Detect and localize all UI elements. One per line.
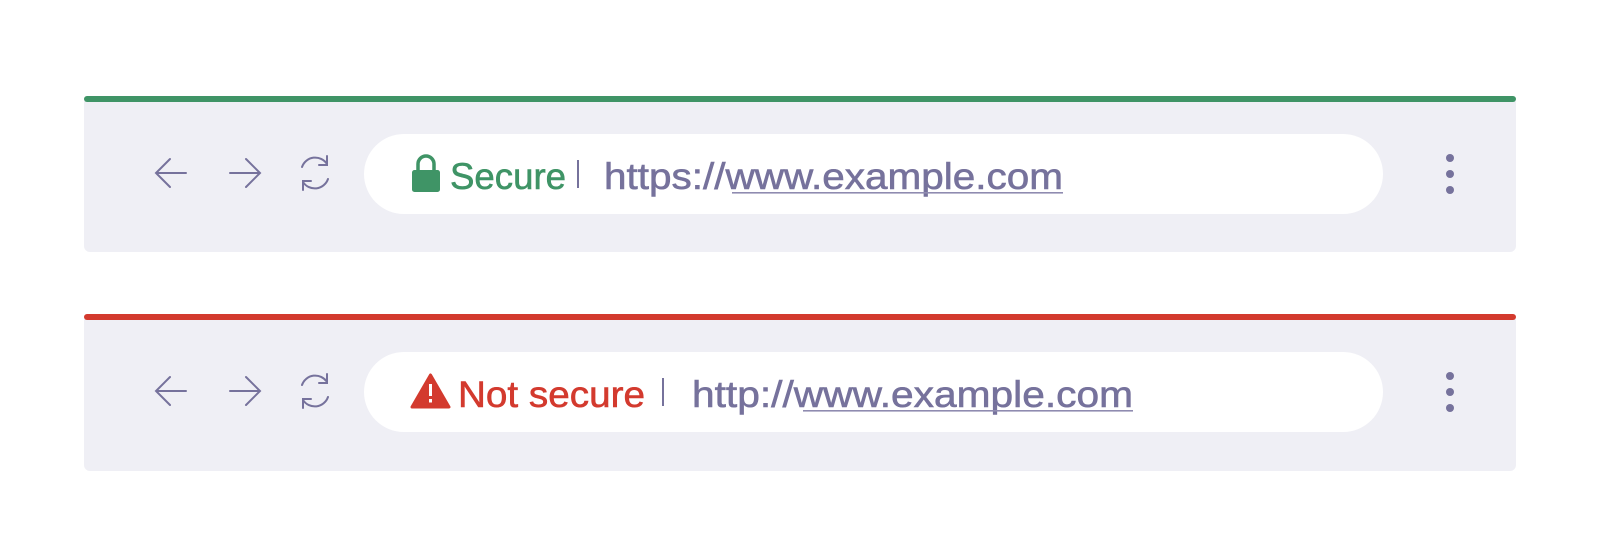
url: http: http://www.example.com [692, 374, 1133, 415]
green top line [84, 96, 1516, 102]
icon: forward arrow [230, 377, 260, 405]
address pill [364, 134, 1383, 214]
icon: refresh [302, 156, 328, 190]
label: Secure: Secure [450, 156, 566, 197]
address pill [364, 352, 1383, 432]
icon: menu dots [1446, 154, 1454, 194]
panel: secure browser bar [84, 96, 1516, 252]
url: https: https://www.example.com [604, 156, 1063, 197]
icon: refresh [302, 374, 328, 408]
icon: lock [412, 156, 440, 192]
icon: back arrow [156, 377, 186, 405]
red top line [84, 314, 1516, 320]
panel: not secure browser bar [84, 314, 1516, 471]
icon: forward arrow [230, 159, 260, 187]
icon: back arrow [156, 159, 186, 187]
icon: warning triangle [412, 375, 449, 407]
icon: menu dots [1446, 372, 1454, 412]
label: Not secure: Not secure [458, 374, 645, 415]
